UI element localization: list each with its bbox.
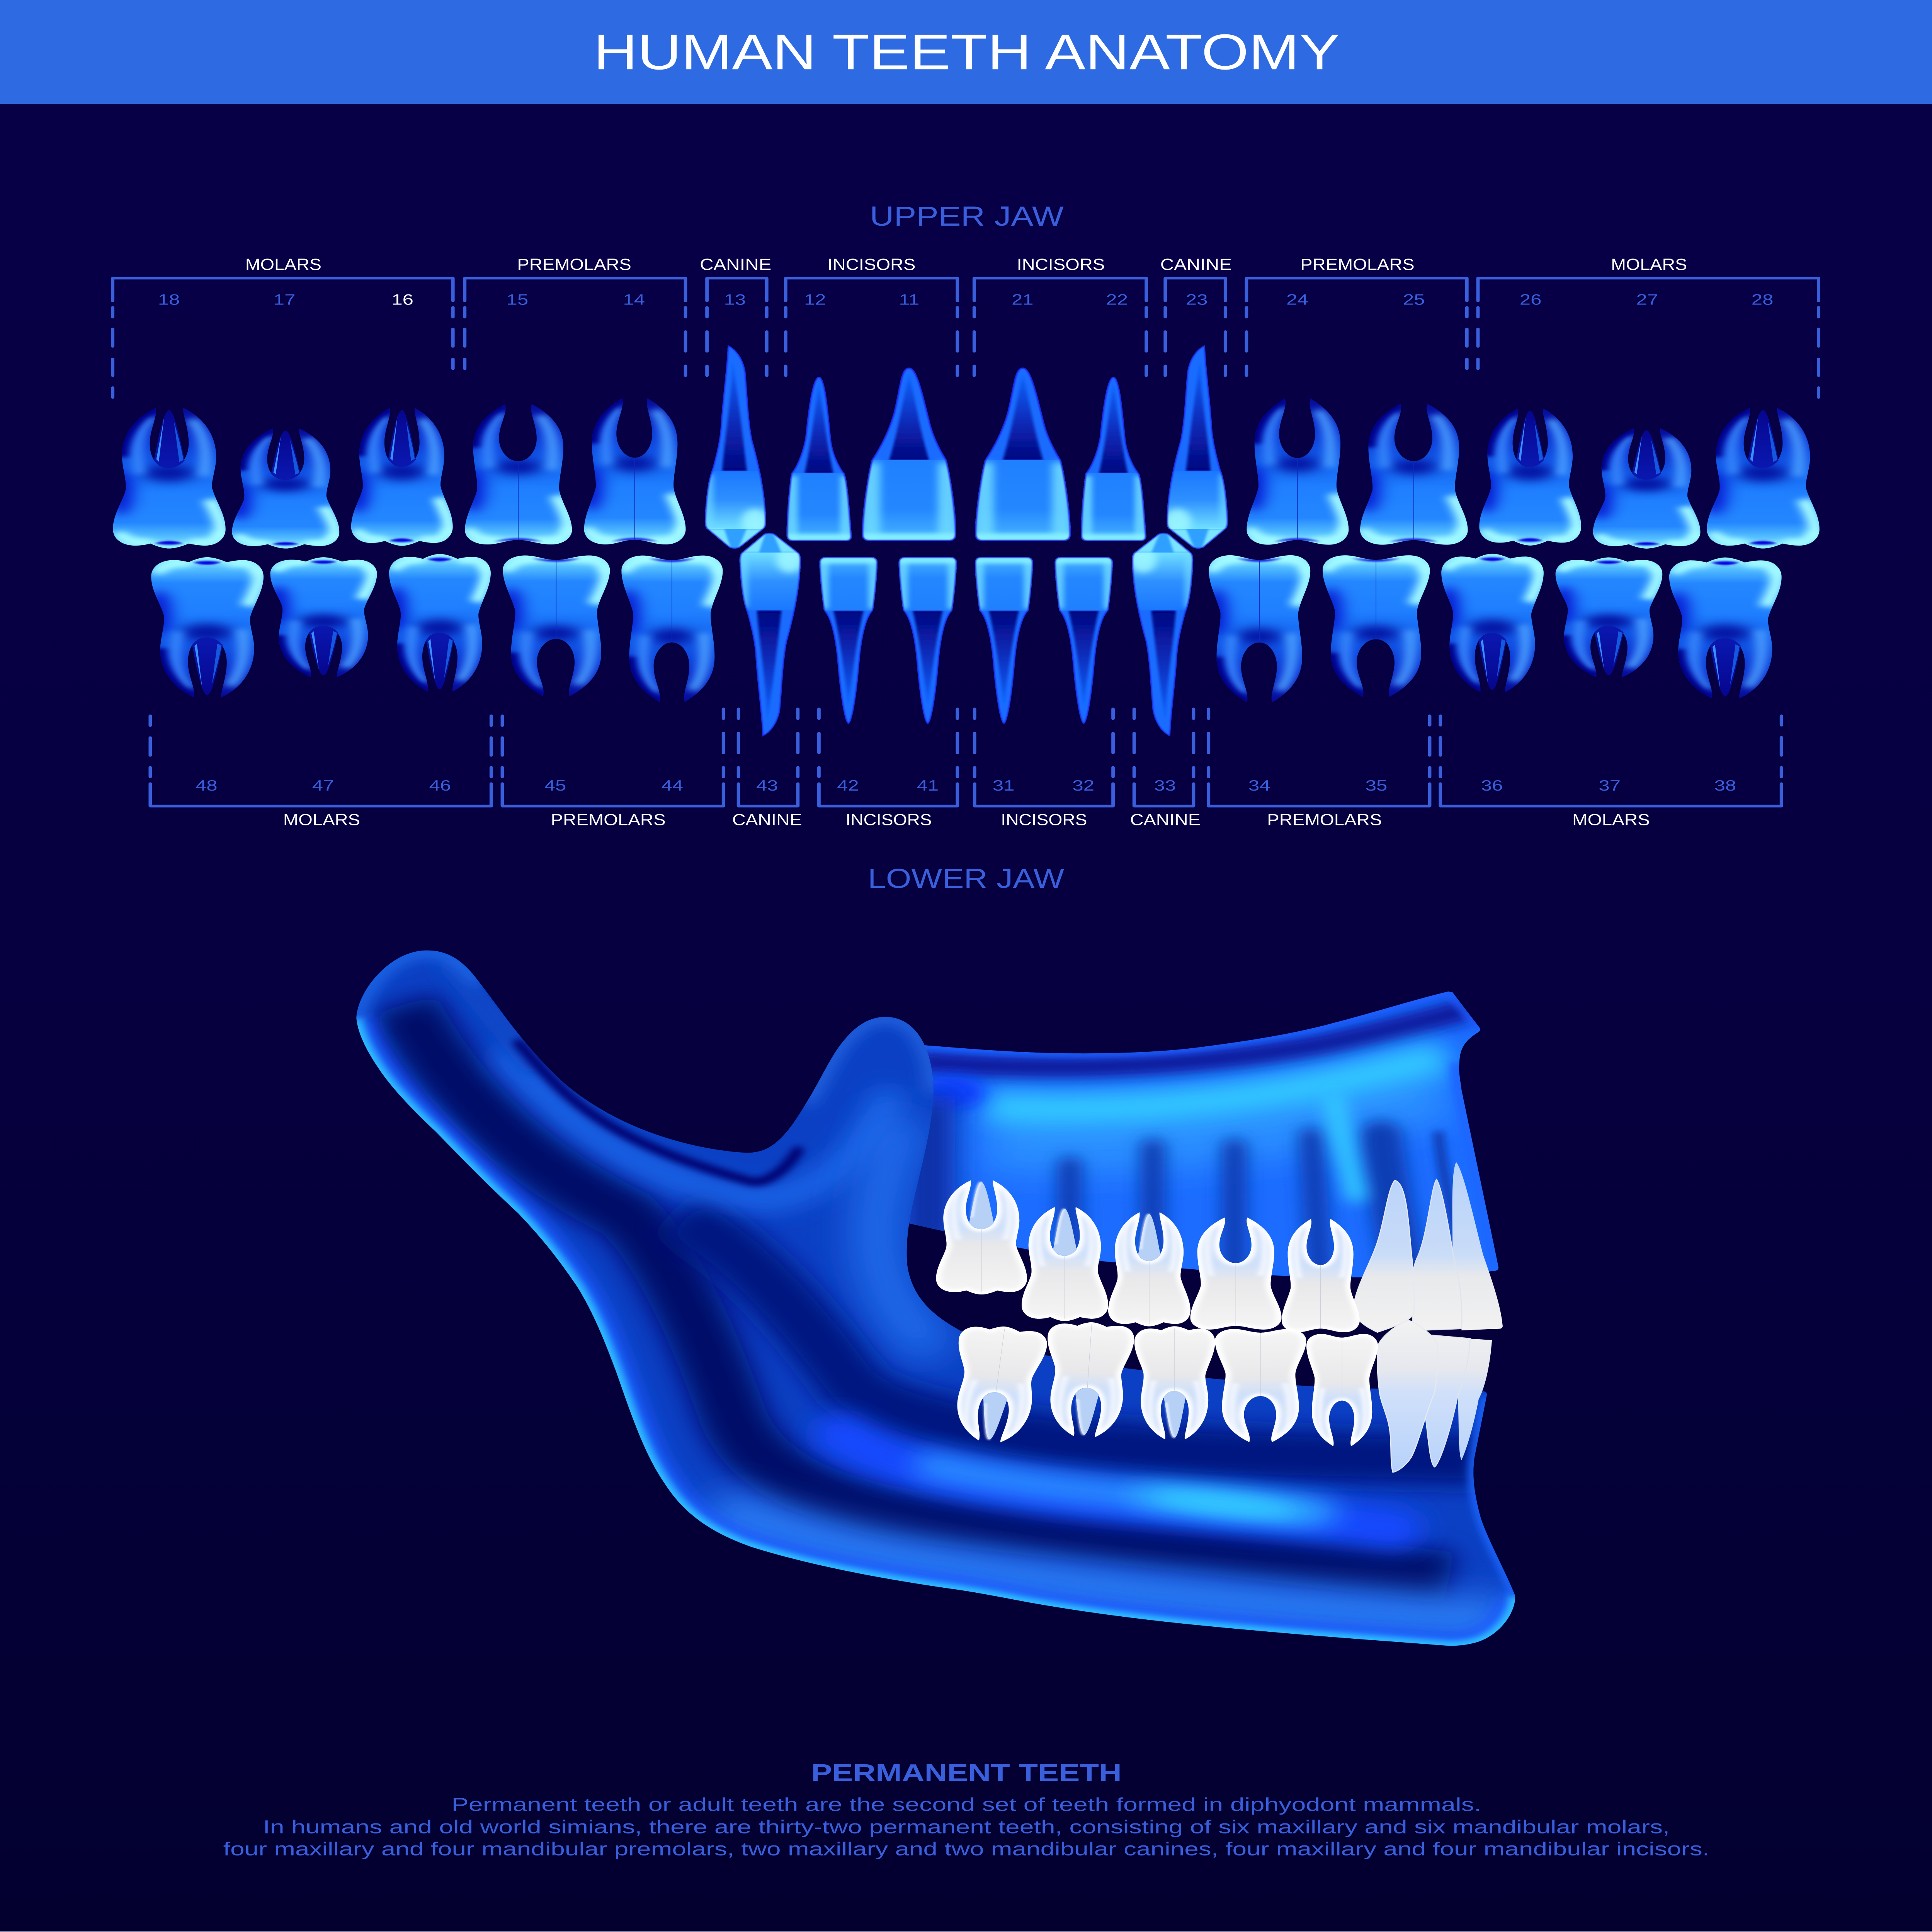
upper jaw tooth numbers	[158, 291, 1773, 308]
lower jaw group labels: CANINE	[1130, 811, 1201, 829]
white teeth: upper arch	[929, 1162, 1503, 1335]
lower jaw tooth numbers: 37	[1599, 777, 1621, 794]
lower jaw group labels	[283, 811, 1650, 829]
upper jaw group labels: CANINE	[1160, 256, 1232, 274]
upper jaw group labels	[245, 256, 1687, 274]
upper jaw tooth numbers: 16	[391, 291, 413, 308]
lower jaw tooth numbers: 45	[544, 777, 566, 794]
upper jaw tooth numbers: 12	[804, 291, 826, 308]
lower jaw group labels: CANINE	[732, 811, 802, 829]
lower jaw tooth numbers: 47	[312, 777, 334, 794]
tooth 41	[893, 555, 962, 725]
tooth 12	[781, 375, 857, 544]
tooth 17	[223, 427, 348, 551]
tooth 22	[1076, 375, 1151, 544]
heading: lower jaw: LOWER JAW	[868, 863, 1064, 894]
tooth 48	[142, 554, 272, 700]
lower third molar	[938, 1320, 1056, 1447]
upper jaw tooth numbers: 14	[623, 291, 645, 308]
upper jaw tooth numbers: 28	[1752, 291, 1773, 308]
tooth 35	[1310, 552, 1442, 699]
lower jaw tooth numbers: 31	[993, 777, 1015, 794]
lower teeth row	[142, 529, 1791, 738]
lower lateral incisor	[1425, 1335, 1470, 1467]
tooth 21	[971, 366, 1075, 543]
upper jaw group labels: PREMOLARS	[517, 256, 631, 274]
lower jaw tooth numbers: 46	[429, 777, 451, 794]
upper jaw tooth numbers: 17	[274, 291, 295, 308]
jaw illustration	[340, 938, 1538, 1661]
footer heading: PERMANENT TEETH	[811, 1759, 1122, 1786]
tooth 42	[814, 555, 883, 725]
upper jaw group labels: INCISORS	[828, 256, 915, 274]
tooth 18	[104, 406, 235, 552]
upper jaw group labels: INCISORS	[1017, 256, 1105, 274]
lower jaw tooth numbers: 48	[196, 777, 218, 794]
upper jaw tooth numbers: 26	[1520, 291, 1541, 308]
upper jaw group labels: MOLARS	[1611, 256, 1687, 274]
upper jaw group labels: PREMOLARS	[1300, 256, 1415, 274]
tooth 25	[1348, 401, 1480, 548]
tooth 32	[1049, 555, 1118, 725]
lower jaw group labels: PREMOLARS	[551, 811, 666, 829]
upper second premolar	[1180, 1216, 1292, 1332]
tooth 27	[1584, 426, 1709, 551]
upper jaw tooth numbers: 18	[158, 291, 180, 308]
upper third molar	[929, 1179, 1034, 1297]
lower jaw brackets	[150, 709, 1781, 806]
tooth 45	[491, 552, 622, 699]
tooth 34	[1197, 551, 1321, 705]
lower jaw tooth numbers: 44	[661, 777, 683, 794]
footer text block	[223, 1759, 1709, 1859]
upper jaw tooth numbers: 25	[1403, 291, 1425, 308]
lower second premolar	[1204, 1326, 1316, 1444]
lower canine	[1377, 1320, 1438, 1472]
tooth 38	[1660, 554, 1791, 701]
lower jaw tooth numbers: 41	[917, 777, 939, 794]
upper first premolar	[1273, 1217, 1368, 1335]
tooth 28	[1697, 406, 1828, 552]
tooth 26	[1471, 406, 1589, 549]
lower first premolar	[1298, 1331, 1386, 1448]
upper jaw group labels: MOLARS	[245, 256, 321, 274]
tooth 47	[261, 554, 386, 679]
description: four maxillary and four mandibular premolars, two maxillary and two mandibular canines, four maxillary and four mandibular incisors.	[223, 1838, 1709, 1859]
lower central incisor	[1458, 1338, 1492, 1460]
upper teeth row	[104, 344, 1828, 552]
upper canine	[1353, 1180, 1414, 1332]
tooth 36	[1433, 550, 1552, 694]
lower jaw group labels: MOLARS	[283, 811, 360, 829]
maxilla	[895, 980, 1510, 1283]
lower jaw tooth numbers: 33	[1154, 777, 1176, 794]
header banner	[0, 0, 1932, 104]
tooth 43	[731, 529, 807, 738]
upper jaw tooth numbers: 11	[899, 291, 919, 308]
tooth 46	[381, 551, 499, 694]
lower first molar	[1128, 1323, 1221, 1441]
heading: upper jaw: UPPER JAW	[870, 201, 1064, 232]
tooth 31	[970, 555, 1038, 725]
lower jaw tooth numbers: 34	[1248, 777, 1270, 794]
upper central incisor	[1452, 1162, 1503, 1330]
lower jaw group labels: INCISORS	[845, 811, 932, 829]
lower jaw group labels: PREMOLARS	[1267, 811, 1382, 829]
upper jaw tooth numbers: 27	[1636, 291, 1658, 308]
lower jaw group labels: INCISORS	[1001, 811, 1087, 829]
upper jaw tooth numbers: 23	[1186, 291, 1208, 308]
tooth 15	[452, 402, 584, 548]
mandible	[340, 938, 1538, 1661]
upper jaw tooth numbers: 24	[1286, 291, 1308, 308]
tooth 13	[697, 344, 772, 552]
lower jaw tooth numbers: 35	[1366, 777, 1387, 794]
lower jaw tooth numbers: 32	[1072, 777, 1094, 794]
lower second molar	[1034, 1317, 1142, 1440]
description: Permanent teeth or adult teeth are the second set of teeth formed in diphyodont mammals.	[452, 1794, 1481, 1815]
upper first molar	[1101, 1211, 1197, 1329]
upper jaw tooth numbers: 21	[1012, 291, 1034, 308]
tooth 14	[572, 396, 697, 548]
tooth 37	[1546, 554, 1671, 679]
lower jaw tooth numbers: 42	[837, 777, 859, 794]
title: HUMAN TEETH ANATOMY	[594, 24, 1340, 80]
tooth 11	[858, 366, 961, 543]
upper jaw tooth numbers: 15	[507, 291, 528, 308]
description: In humans and old world simians, there are thirty-two permanent teeth, consisting of six maxillary and six mandibular molars,	[263, 1816, 1670, 1837]
lower jaw tooth numbers: 36	[1481, 777, 1503, 794]
lower jaw group labels: MOLARS	[1572, 811, 1650, 829]
upper second molar	[1014, 1205, 1115, 1324]
tooth 44	[610, 552, 734, 704]
tooth 16	[343, 406, 461, 549]
tooth 23	[1160, 344, 1236, 552]
upper lateral incisor	[1412, 1179, 1462, 1331]
white teeth: lower arch	[938, 1317, 1492, 1472]
upper jaw brackets	[113, 278, 1818, 397]
lower jaw tooth numbers: 38	[1714, 777, 1736, 794]
lower jaw tooth numbers: 43	[756, 777, 778, 794]
lower jaw tooth numbers	[196, 777, 1736, 794]
upper jaw tooth numbers: 13	[724, 291, 746, 308]
tooth 24	[1235, 396, 1360, 549]
description	[223, 1794, 1709, 1859]
upper jaw tooth numbers: 22	[1106, 291, 1128, 308]
upper jaw group labels: CANINE	[700, 256, 771, 274]
tooth 33	[1126, 529, 1201, 738]
